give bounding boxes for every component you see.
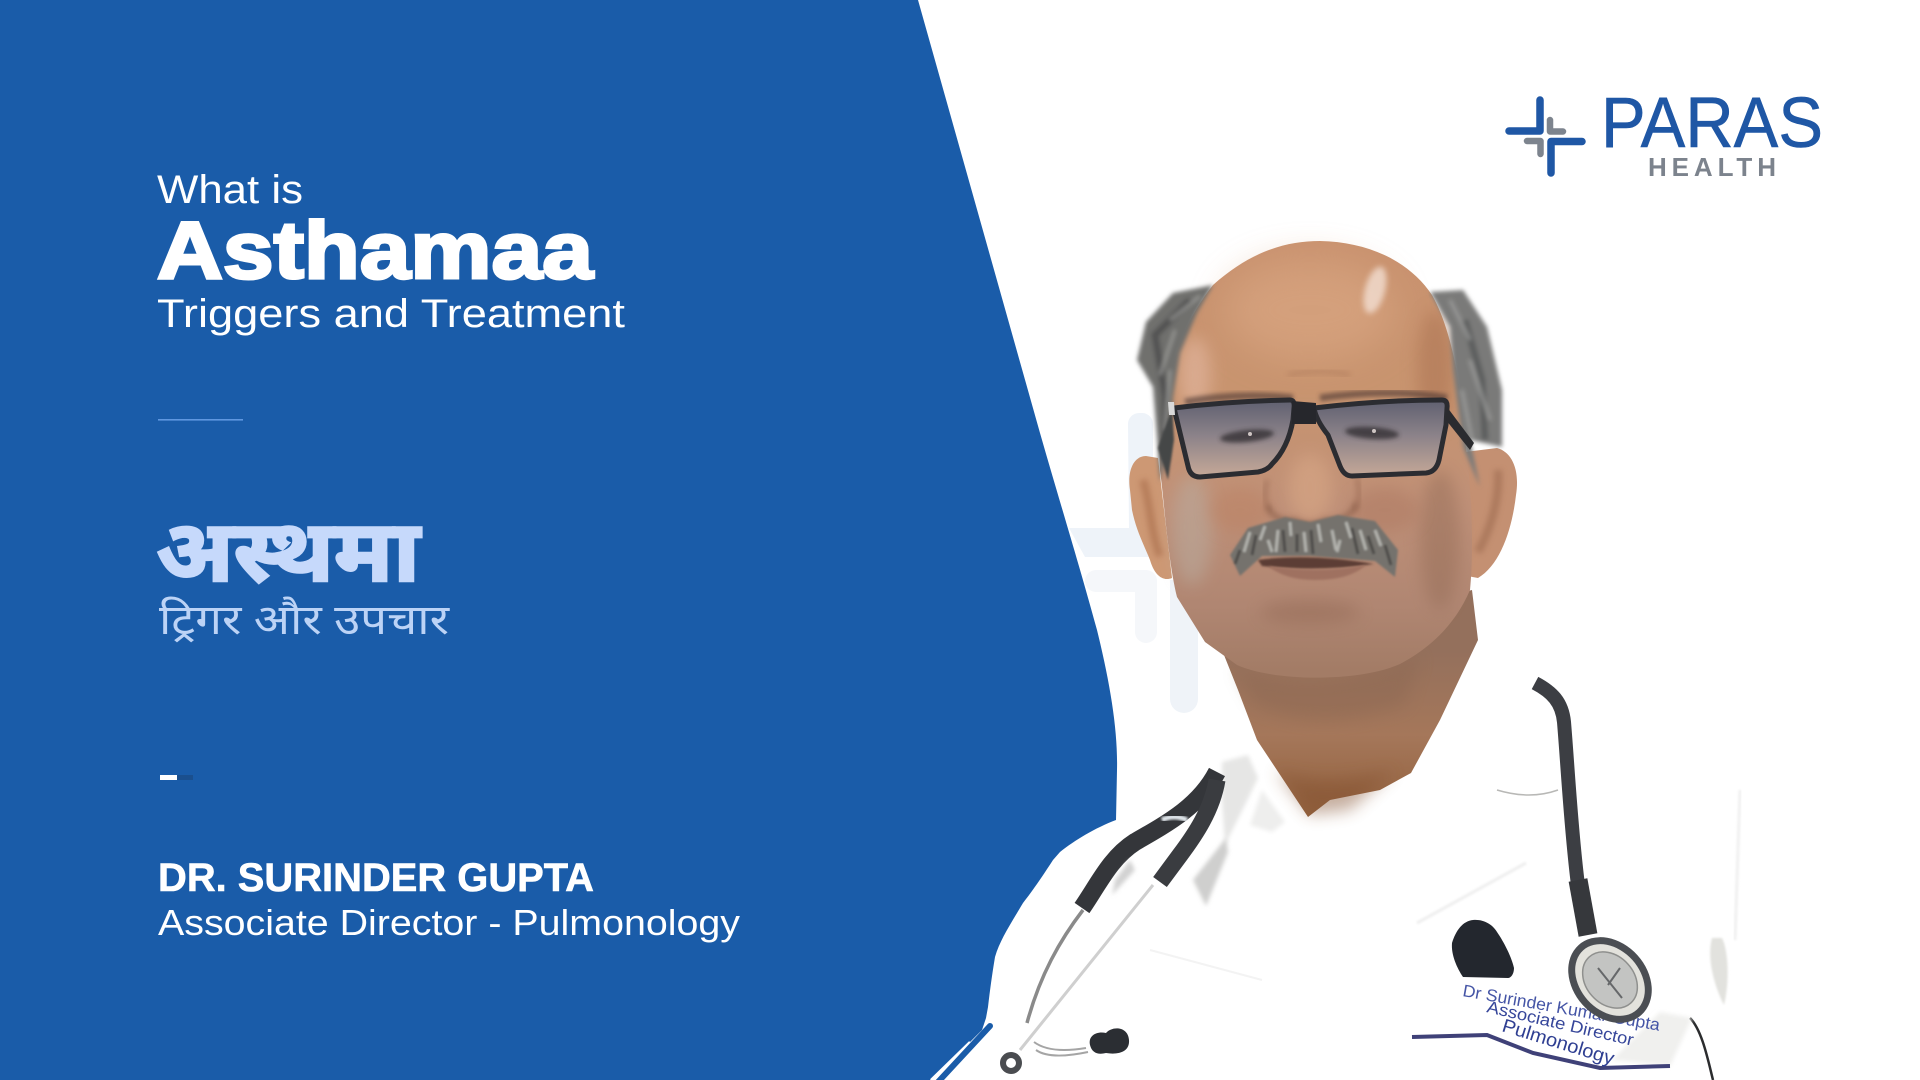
nose — [1265, 454, 1359, 524]
eye: right — [1345, 425, 1399, 441]
moustache — [1230, 515, 1398, 577]
watermark: faint logo glyph — [1069, 413, 1198, 713]
doctor role: Associate Director - Pulmonology — [158, 902, 740, 943]
pocket shading — [1612, 1012, 1692, 1066]
glasses — [1158, 400, 1474, 480]
head: face skin — [1160, 241, 1472, 678]
heading: Triggers and Treatment: Triggers and Treatment — [157, 292, 625, 336]
logo wordmark: HEALTH: HEALTH — [1648, 152, 1776, 182]
dash accent — [160, 775, 193, 780]
Hindi subheading: triggers and treatment: ट्रिगर और उपचार — [159, 597, 450, 652]
hair: left side — [1137, 285, 1213, 482]
stethoscope: left tubes — [1020, 772, 1217, 1050]
stethoscope: chest piece — [1551, 920, 1669, 1040]
doctor portrait — [1003, 241, 1740, 1080]
lapel microphone — [1452, 920, 1514, 978]
pocket line — [1412, 1035, 1670, 1068]
badge: department: Pulmonology — [1500, 1016, 1617, 1070]
stripe: white and blue accent at shoulder — [931, 1026, 990, 1080]
Hindi heading: asthma: अस्थमा — [156, 505, 422, 617]
neck — [1222, 590, 1478, 817]
eye: left — [1220, 427, 1274, 445]
bridge and temples — [1292, 401, 1316, 424]
stethoscope: earpiece tip — [1090, 1028, 1129, 1054]
background panel: blue curved shape — [0, 0, 1117, 1080]
title block — [157, 168, 625, 336]
badge: role: Associate Director — [1485, 997, 1636, 1050]
mouth — [1258, 557, 1374, 580]
face shading — [1172, 260, 1460, 624]
divider line — [158, 419, 243, 421]
hair: right side — [1430, 290, 1502, 487]
coat: collar — [1193, 755, 1285, 906]
left lens — [1174, 400, 1294, 477]
coat badge text — [1461, 981, 1662, 1070]
doctor credit — [158, 856, 740, 943]
heading: What is: What is — [157, 168, 303, 212]
heading: Asthamaa: Asthamaa — [157, 206, 594, 296]
ear: right — [1462, 448, 1517, 578]
coat: shading lines — [1150, 790, 1740, 1080]
Hindi title block — [156, 505, 450, 652]
stethoscope: right tube — [1535, 683, 1588, 935]
doctor name: DR. SURINDER GUPTA — [158, 856, 594, 900]
badge: name: Dr Surinder Kumar Gupta — [1461, 981, 1662, 1035]
icon: cross mark — [1509, 100, 1582, 173]
logo: Paras Health — [1509, 84, 1823, 182]
ear: left — [1129, 456, 1172, 579]
logo wordmark: PARAS: PARAS — [1601, 84, 1823, 163]
stethoscope: earpiece left — [1003, 1042, 1088, 1071]
right lens — [1314, 400, 1447, 476]
